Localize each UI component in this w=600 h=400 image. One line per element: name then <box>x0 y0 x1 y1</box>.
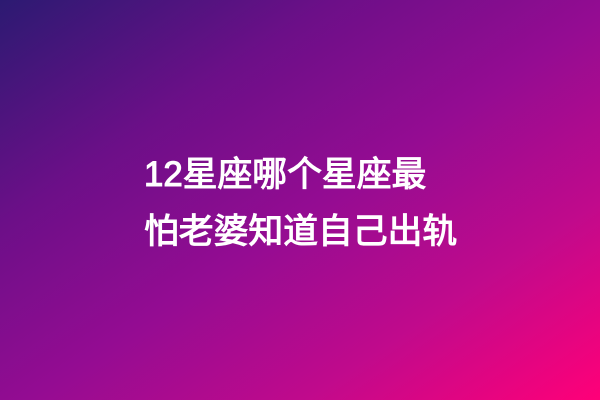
title: 怕老婆知道自己出轨 <box>144 212 457 251</box>
title <box>144 155 457 251</box>
title: 12星座哪个星座最 <box>144 155 426 194</box>
